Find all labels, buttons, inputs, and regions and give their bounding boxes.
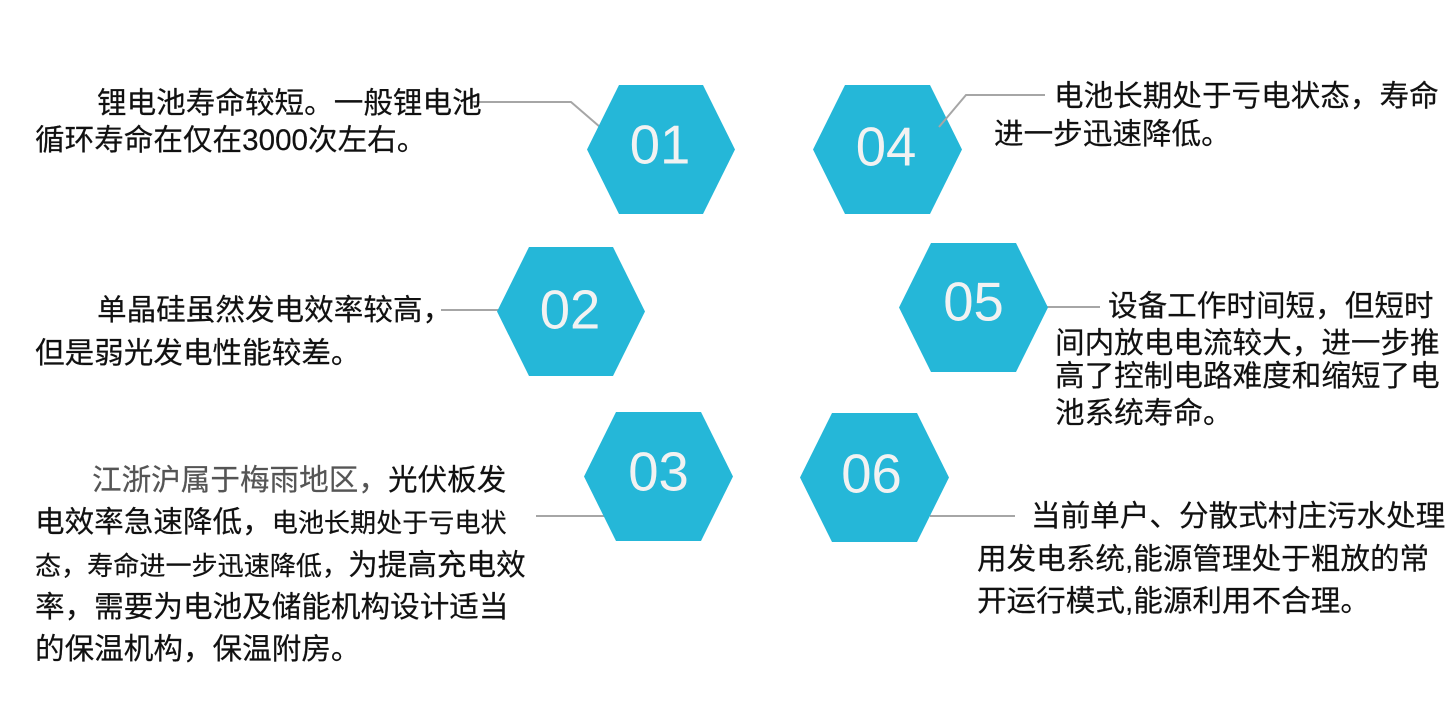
text block 05: 池系统寿命。 [1055, 397, 1233, 430]
text block 04 [994, 80, 1439, 151]
text block 04: 电池长期处于亏电状态，寿命 [1054, 80, 1439, 113]
text block 01 [35, 87, 482, 157]
hexagon 06 [800, 413, 949, 542]
connector 02 [441, 309, 500, 311]
connector 06 [930, 515, 1015, 517]
text block 06 [977, 500, 1445, 618]
hexagon 03 [584, 412, 733, 541]
text block 03: 率，需要为电池及储能机构设计适当 [35, 591, 508, 624]
text block 05 [1055, 290, 1440, 430]
hexagon 03: 03 [628, 442, 689, 502]
text block 03 [35, 464, 526, 666]
hexagon 05: 05 [943, 272, 1004, 332]
text block 03: 态，寿命进一步迅速降低，为提高充电效 [35, 549, 526, 582]
hexagon 01: 01 [630, 114, 690, 176]
text block 02 [35, 294, 452, 370]
text block 05: 高了控制电路难度和缩短了电 [1055, 360, 1440, 393]
text block 02: 但是弱光发电性能较差。 [35, 337, 361, 370]
hexagon 04 [813, 85, 962, 214]
text block 03: 电效率急速降低，电池长期处于亏电状 [35, 506, 507, 539]
text block 01: 锂电池寿命较短。一般锂电池 [97, 87, 482, 120]
text block 02: 单晶硅虽然发电效率较高， [97, 294, 452, 327]
text block 05: 设备工作时间短，但短时 [1108, 290, 1434, 323]
hexagon 01 [587, 85, 735, 214]
connector 05 [1045, 306, 1100, 308]
text block 06: 用发电系统,能源管理处于粗放的常 [977, 543, 1429, 576]
connector 04 [939, 95, 1045, 127]
hexagon 02 [497, 247, 645, 376]
text block 06: 开运行模式,能源利用不合理。 [977, 585, 1370, 618]
text block 05: 间内放电电流较大，进一步推 [1055, 327, 1440, 360]
connector 03 [536, 515, 606, 517]
connector 01 [470, 102, 600, 127]
hexagon 04: 04 [856, 116, 916, 178]
text block 06: 当前单户、分散式村庄污水处理 [1031, 500, 1445, 533]
hexagon 05 [899, 243, 1048, 372]
text block 04: 进一步迅速降低。 [994, 118, 1231, 151]
hexagon 06: 06 [841, 444, 902, 504]
text block 01: 循环寿命在仅在3000次左右。 [35, 124, 426, 157]
hexagon 02: 02 [540, 280, 600, 340]
text block 03: 的保温机构，保温附房。 [35, 633, 361, 666]
text block 03: 江浙沪属于梅雨地区，光伏板发 [92, 464, 506, 497]
